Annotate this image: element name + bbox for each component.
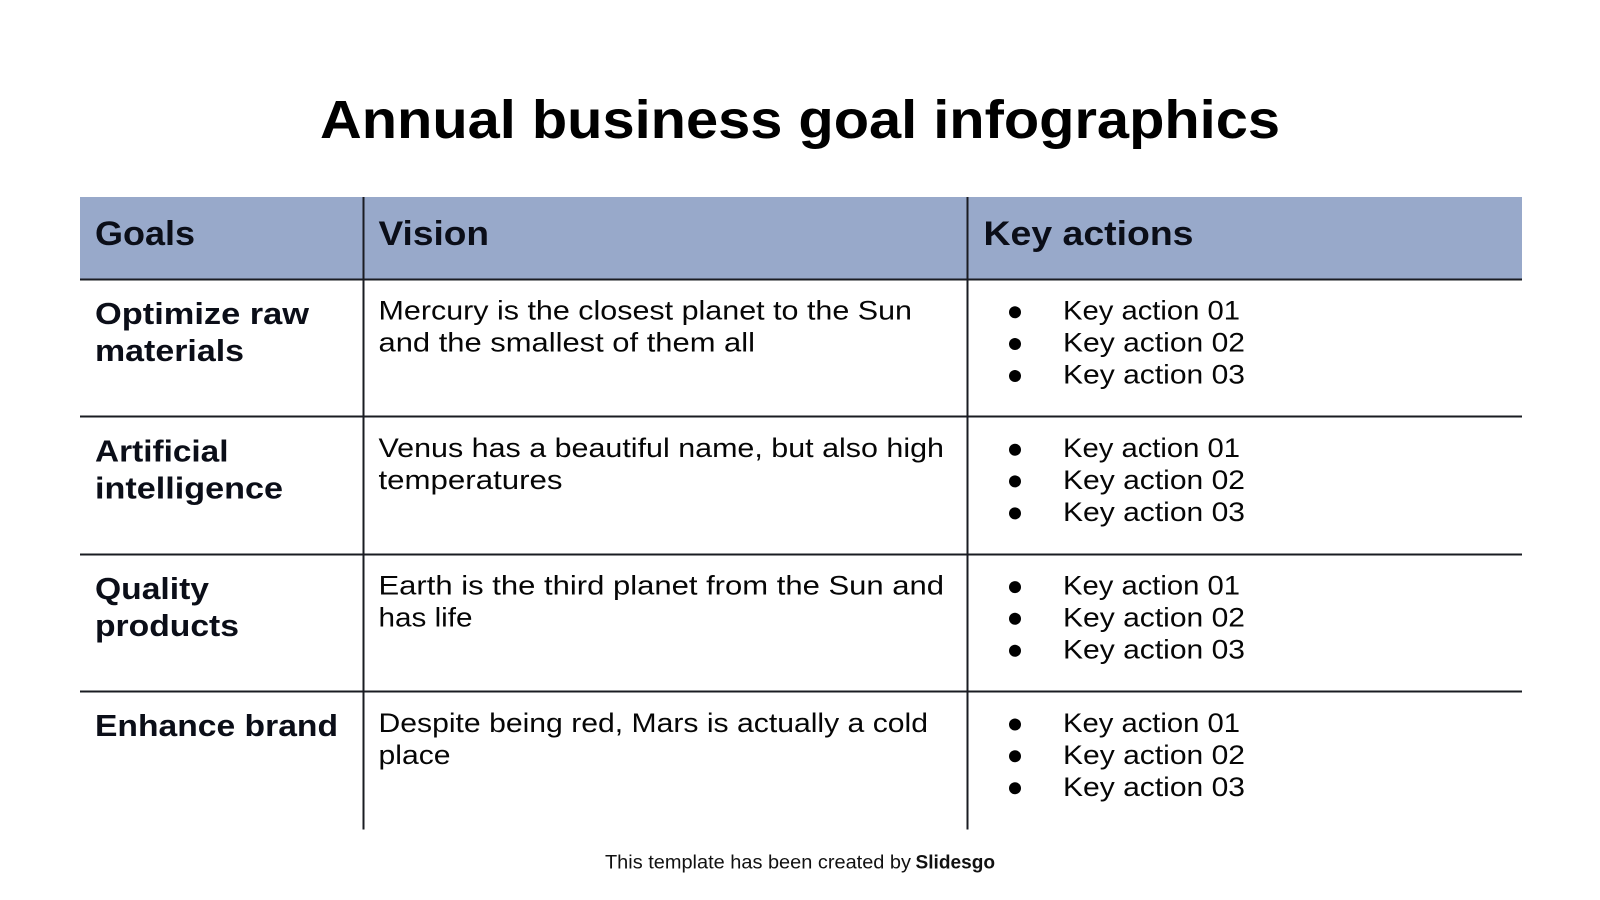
vision text: has life (378, 602, 472, 632)
goal label: Quality (95, 571, 210, 606)
goal label: Enhance brand (95, 708, 338, 743)
key actions list (1009, 433, 1245, 527)
key actions list: Key action 01 (1063, 296, 1240, 326)
key actions list: Key action 02 (1063, 602, 1245, 632)
table header row (80, 197, 1522, 279)
vision text: Despite being red, Mars is actually a cold (378, 708, 928, 738)
vision text: temperatures (378, 465, 562, 495)
table (80, 197, 1522, 830)
key actions list: Key action 03 (1063, 360, 1245, 390)
key actions list: Key action 01 (1063, 433, 1240, 463)
header: key actions: Key actions (984, 215, 1194, 253)
key actions list: Key action 03 (1063, 497, 1245, 527)
goal label: products (95, 608, 239, 643)
goal label: Optimize raw (95, 296, 310, 331)
key actions list: Key action 01 (1063, 570, 1240, 600)
key actions list: Key action 01 (1063, 708, 1240, 738)
header: goals: Goals (95, 215, 195, 253)
title: Annual business goal infographics (320, 90, 1280, 150)
header: vision: Vision (378, 215, 489, 253)
vision text: place (378, 740, 450, 770)
goal label: Artificial (95, 433, 228, 468)
goal label: materials (95, 333, 244, 368)
row: optimize raw materials (95, 296, 1245, 390)
footer credit: Slidesgo (916, 853, 995, 874)
key actions list (1009, 570, 1245, 664)
row: enhance brand (95, 708, 1245, 802)
vision text: Earth is the third planet from the Sun and (378, 570, 944, 600)
row: artificial intelligence (95, 433, 1245, 527)
key actions list: Key action 03 (1063, 634, 1245, 664)
key actions list (1009, 708, 1245, 802)
key actions list: Key action 03 (1063, 772, 1245, 802)
key actions list: Key action 02 (1063, 328, 1245, 358)
key actions list (1009, 296, 1245, 390)
vision text: Mercury is the closest planet to the Sun (378, 296, 912, 326)
goal label: intelligence (95, 470, 283, 505)
row: quality products (95, 570, 1245, 664)
vision text: Venus has a beautiful name, but also high (378, 433, 944, 463)
key actions list: Key action 02 (1063, 740, 1245, 770)
key actions list: Key action 02 (1063, 465, 1245, 495)
footer credit: This template has been created by (605, 853, 912, 874)
vision text: and the smallest of them all (378, 328, 755, 358)
